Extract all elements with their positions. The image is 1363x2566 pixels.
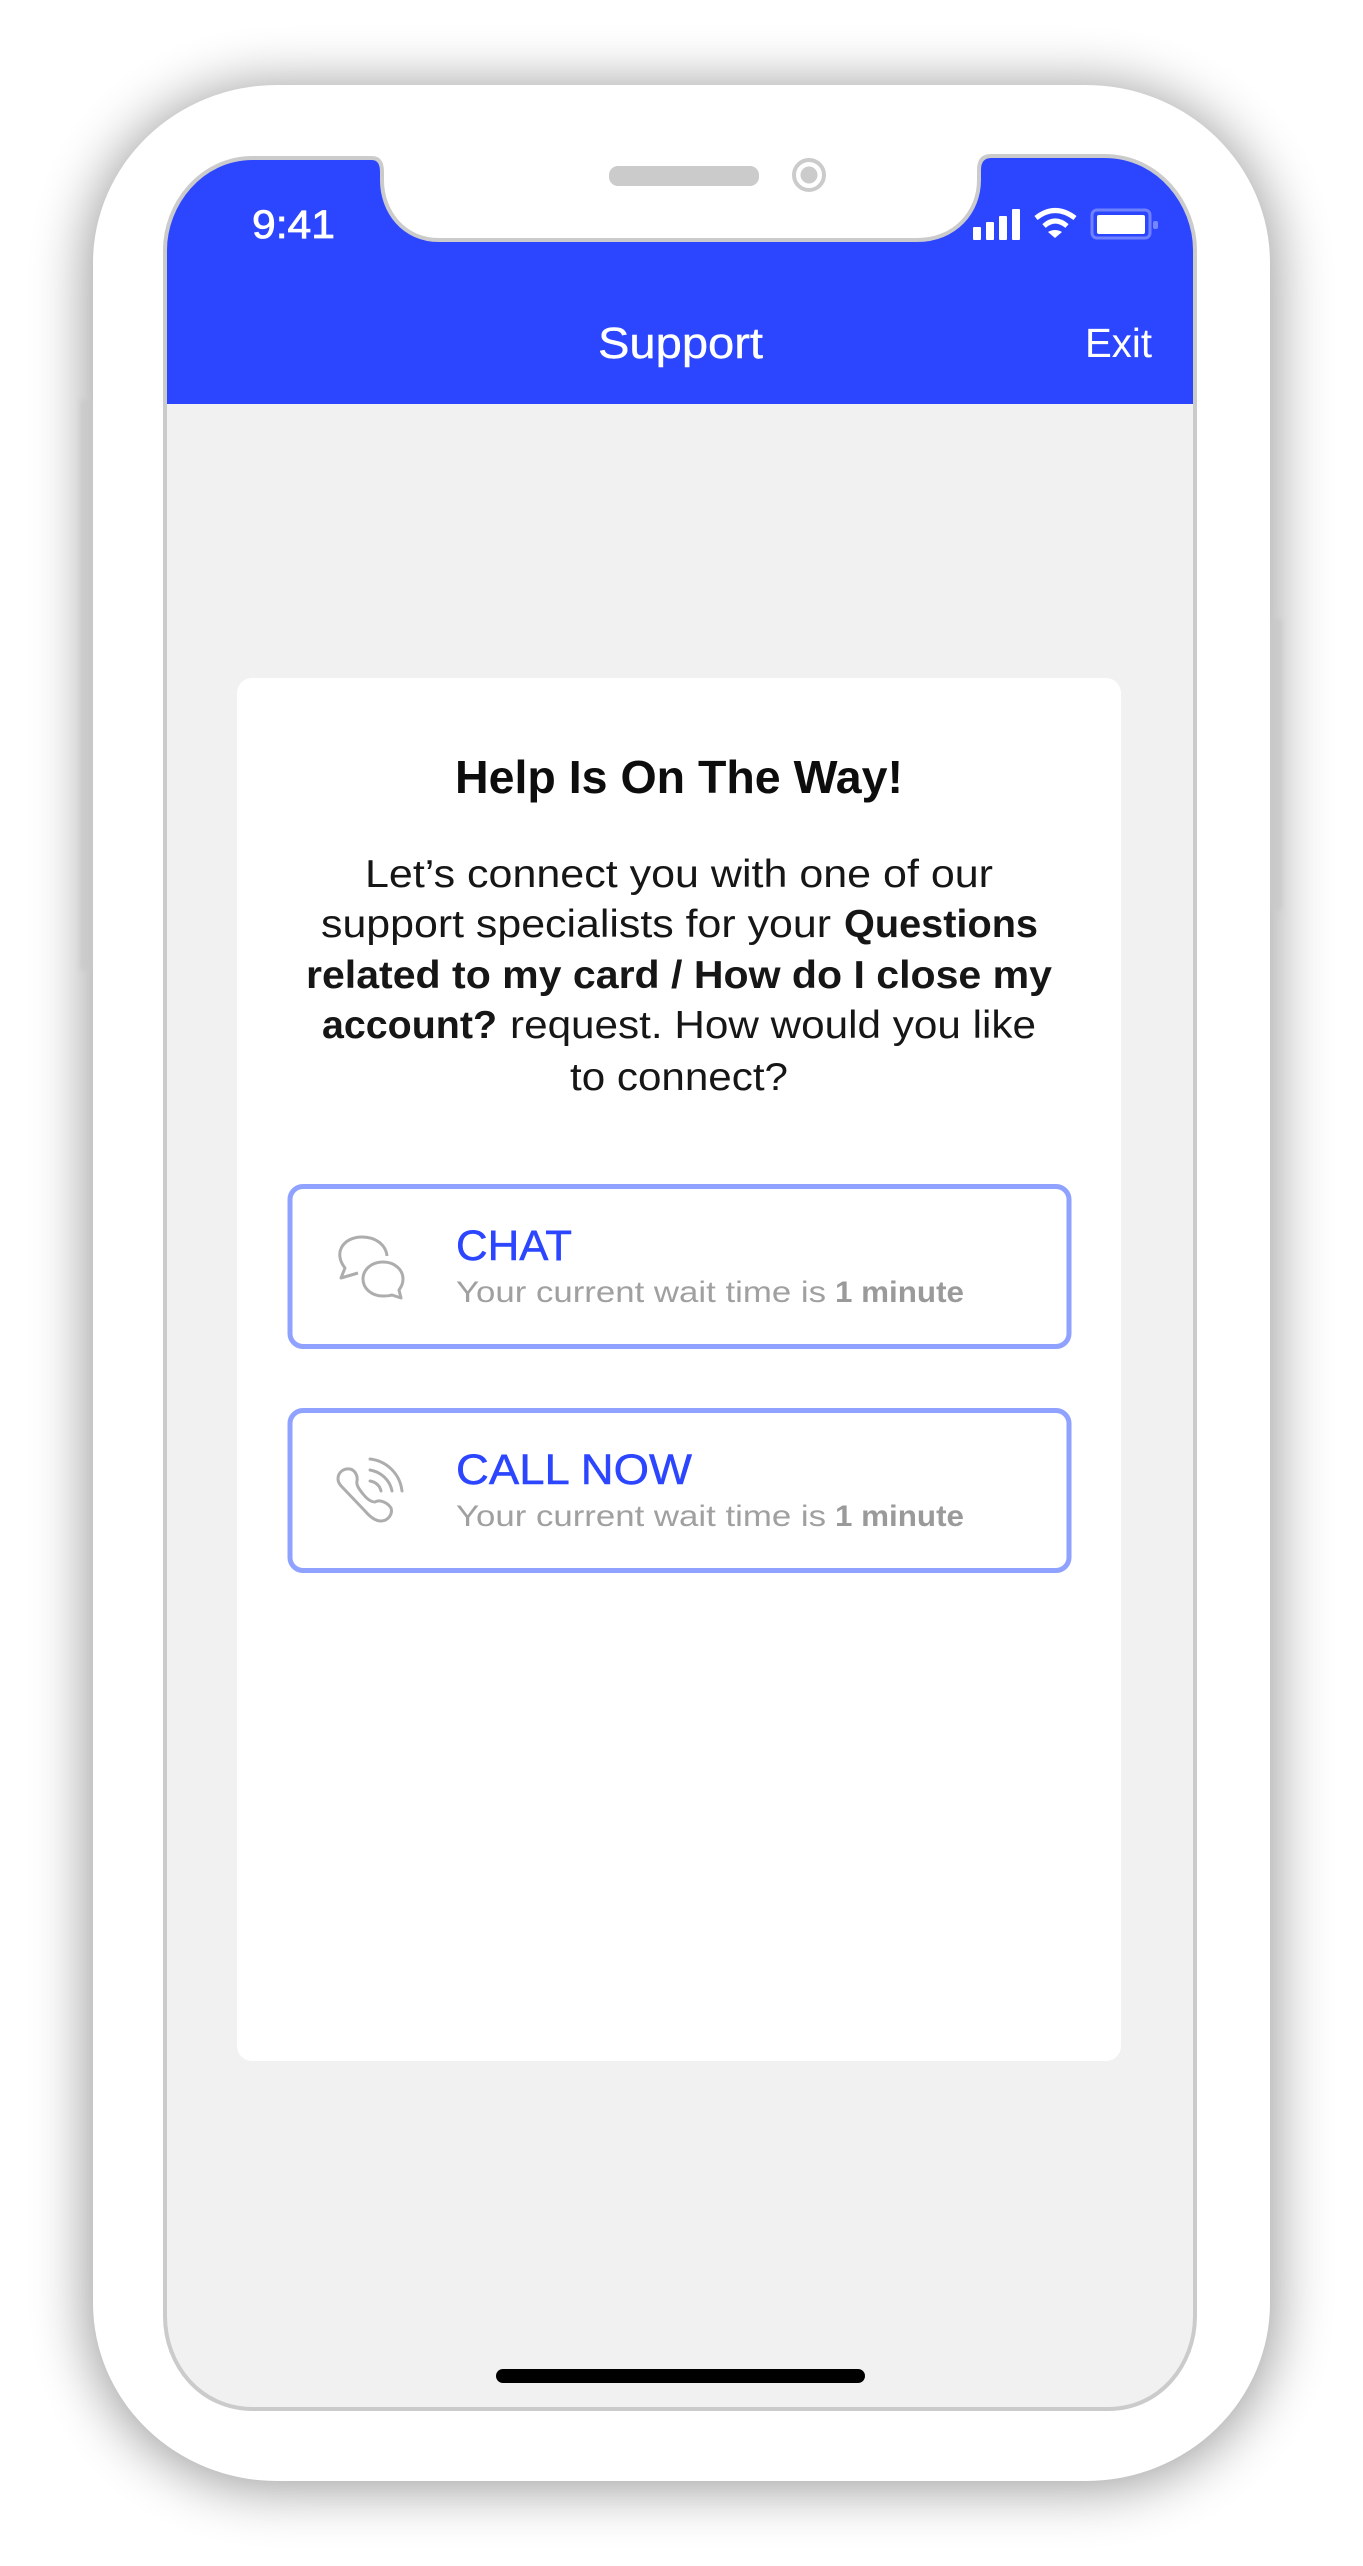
card heading: Help Is On The Way! [455, 751, 903, 803]
card body text: related to my card / How do I close my [306, 954, 1052, 997]
screen outline [165, 156, 1195, 2409]
phone screen [160, 150, 1200, 2409]
status time: 9:41 [252, 203, 335, 247]
home indicator [496, 2369, 865, 2383]
card body text: request. How would you like [510, 1004, 1036, 1047]
icon: chat bubbles [340, 1237, 403, 1298]
card body text: Let’s connect you with one of our [365, 853, 993, 896]
camera [794, 160, 824, 190]
card body text: to connect? [570, 1056, 788, 1099]
header title: Support [598, 319, 763, 368]
card body text [306, 853, 1052, 1099]
icon: phone handset [338, 1459, 402, 1521]
chat button: 1 minute [835, 1276, 964, 1309]
card body text: account? [322, 1004, 497, 1047]
chat wait time: Your current wait time is [456, 1276, 826, 1309]
call button [290, 1410, 1069, 1570]
exit link: Exit [1085, 320, 1153, 366]
call button: 1 minute [835, 1500, 964, 1533]
blue header bar [160, 150, 1200, 404]
icon: signal [973, 209, 1020, 240]
screen background [165, 156, 1195, 2409]
call label: CALL NOW [456, 1446, 692, 1494]
card body text: Questions [844, 903, 1038, 946]
icon: battery [1092, 210, 1158, 238]
call wait time: Your current wait time is [456, 1500, 826, 1533]
panel: help card [237, 678, 1121, 2061]
card body text: support specialists for your [321, 903, 831, 946]
speaker [609, 166, 759, 186]
chat button [290, 1186, 1069, 1346]
chat label: CHAT [456, 1222, 572, 1270]
icon: wifi [1036, 210, 1075, 238]
